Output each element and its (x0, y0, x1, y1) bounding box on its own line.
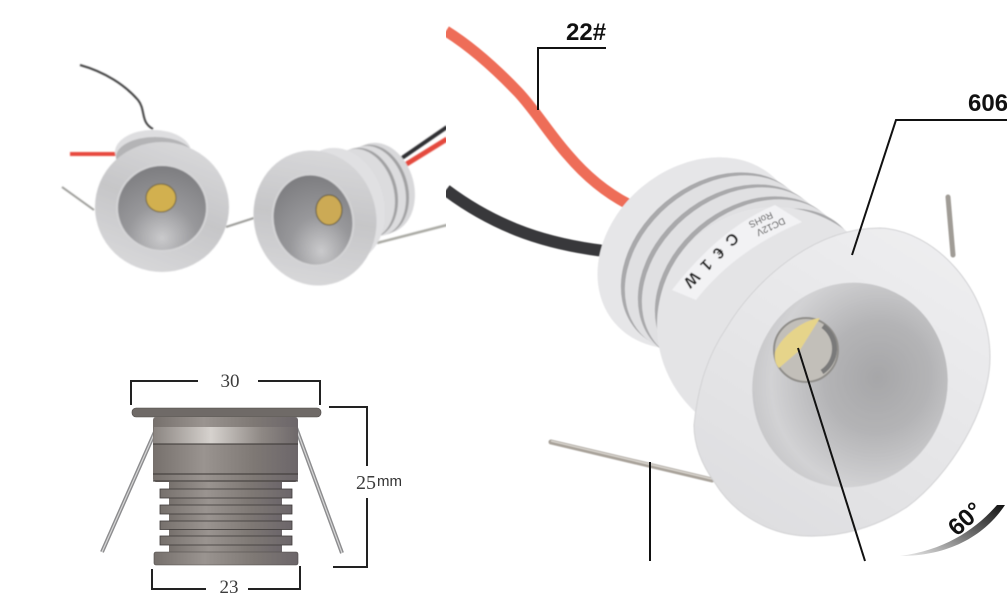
black wire (402, 127, 447, 158)
dimension: 23: 23 (220, 577, 238, 598)
LED lens dark crescent (822, 326, 835, 372)
callout: 22# wire: 22# (566, 19, 606, 46)
dimension: 25mm: 25 (356, 472, 376, 494)
LED chip (775, 318, 820, 368)
flange (132, 408, 321, 417)
upper body highlight (153, 427, 298, 444)
dimension: 25mm (329, 407, 402, 567)
LED chip (146, 184, 176, 212)
red wire (446, 31, 628, 204)
red wire (70, 152, 116, 156)
dimension drawing (102, 408, 342, 565)
section lines (153, 444, 298, 481)
body cylinder (656, 208, 846, 412)
product label: DC12V (754, 215, 787, 238)
red wire (405, 139, 447, 165)
heatsink ribs (362, 144, 410, 234)
photo: large lamp (446, 31, 990, 536)
dimension: 23 (152, 566, 300, 598)
rim (694, 228, 990, 536)
pin (377, 225, 447, 243)
right pin (226, 218, 254, 227)
cone (117, 165, 207, 251)
body (320, 148, 382, 252)
beam angle arc (900, 497, 1005, 556)
product label (672, 205, 802, 300)
black wire (80, 65, 153, 129)
product label: RoHS (747, 209, 774, 230)
left spring leg (102, 425, 158, 552)
heatsink (364, 142, 416, 232)
heatsink (598, 157, 844, 348)
base plate (154, 552, 298, 565)
heatsink core (169, 482, 282, 552)
dimension: 30: 30 (220, 371, 240, 392)
LED lens (774, 318, 838, 382)
callout: 22# wire (538, 19, 606, 110)
dimension: 30 (131, 371, 320, 405)
rim (95, 142, 229, 272)
dimension: 25mm: mm (377, 473, 402, 490)
LED chip (316, 195, 342, 225)
product label: C € 1 W (679, 229, 741, 291)
black wire (446, 190, 604, 251)
reflector cone (752, 282, 948, 488)
rim (253, 150, 377, 286)
arc (900, 505, 1005, 556)
side pin highlight (551, 441, 712, 479)
side pin (551, 442, 712, 480)
60 degree label: 60° (943, 497, 988, 541)
callout: 606 housing (852, 90, 1007, 255)
callout: LED line (798, 348, 865, 561)
spring leg highlights (102, 425, 342, 553)
back pin (948, 197, 953, 255)
callout: 606 housing: 606 (968, 90, 1007, 117)
photo: angled lamp right (253, 124, 446, 286)
heatsink (114, 129, 190, 156)
cone (272, 174, 354, 265)
upper body (153, 417, 298, 482)
photo: front lamp left (62, 65, 254, 272)
heatsink rib (116, 136, 189, 160)
right spring leg (295, 425, 342, 553)
heatsink ribs (160, 489, 292, 545)
callout: pin line (649, 462, 651, 561)
left pin (62, 187, 94, 210)
